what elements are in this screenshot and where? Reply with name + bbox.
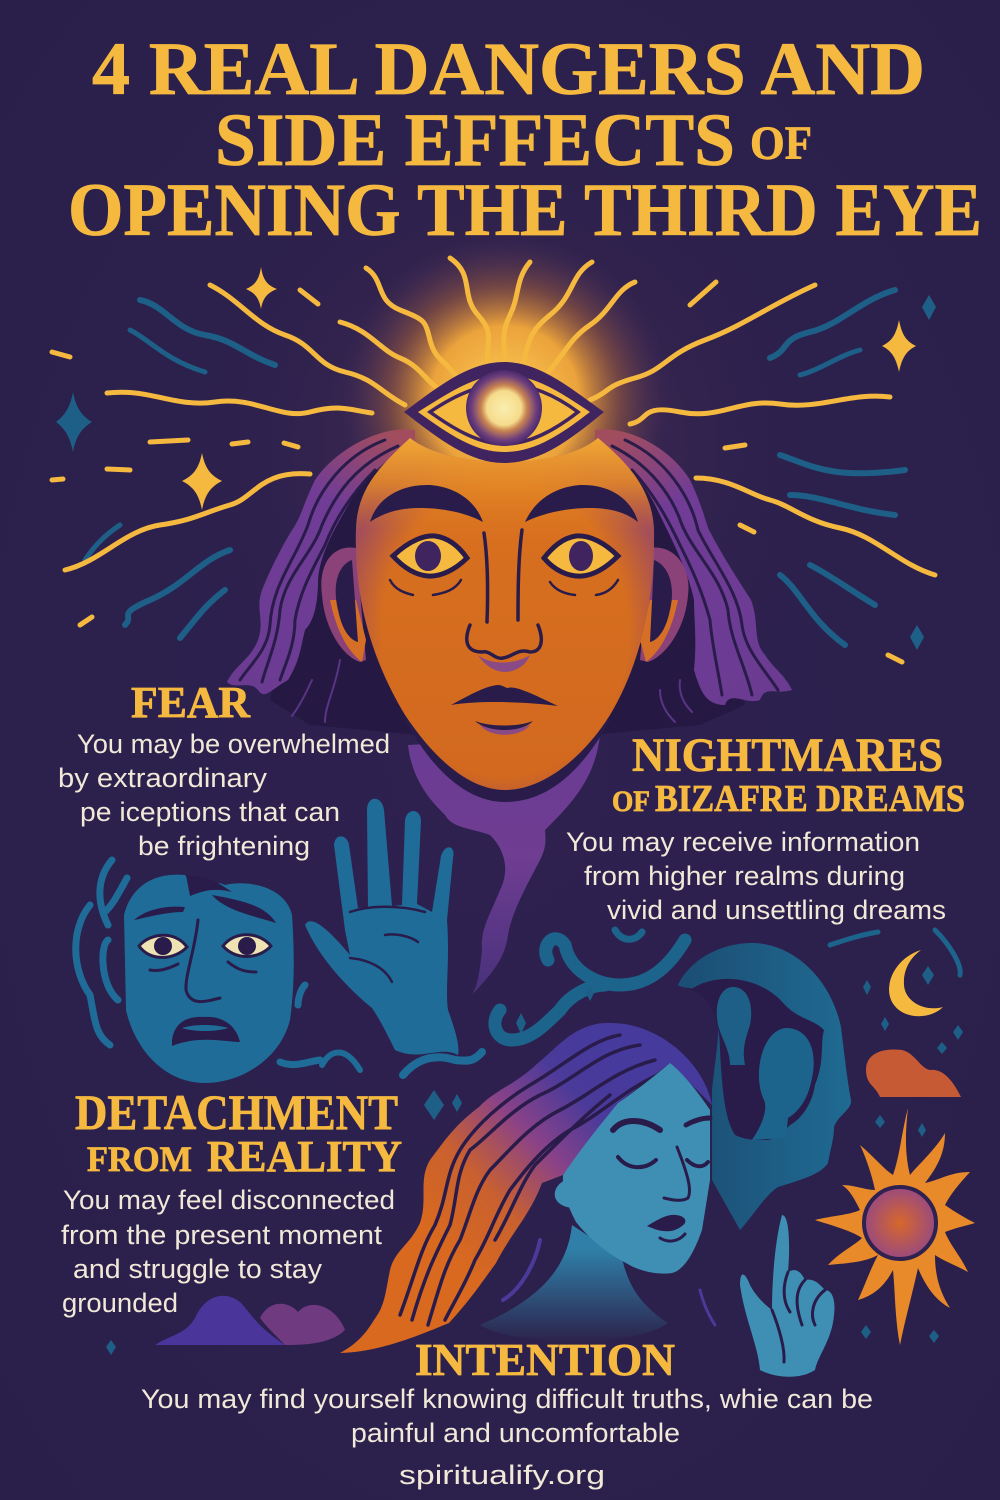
features (613, 1118, 710, 1241)
section: nightmares: OF (612, 785, 650, 818)
faint strands on dark hair (292, 660, 692, 722)
section: detachment: You may feel disconnected (63, 1185, 395, 1215)
ear (555, 1180, 572, 1208)
section: fear: pe iceptions that can (80, 797, 340, 827)
section: intention: INTENTION (415, 1334, 675, 1385)
section: nightmares (566, 729, 965, 925)
hair strands (240, 440, 778, 695)
long hair (340, 1023, 712, 1353)
third eye (404, 362, 604, 463)
sun rays (52, 258, 935, 662)
section: detachment: and struggle to stay (73, 1254, 323, 1284)
icon: crescent moon (889, 950, 943, 1016)
section: detachment: DETACHMENT (75, 1084, 398, 1140)
illustration: teal swirls (106, 930, 960, 1355)
dark under-hair (270, 470, 745, 735)
stars around moon (861, 966, 963, 1343)
section: fear: be frightening (138, 831, 310, 861)
right eye (544, 536, 618, 576)
section: intention: painful and uncomfortable (351, 1418, 680, 1448)
title: OF (750, 117, 812, 170)
section: detachment: REALITY (207, 1132, 402, 1181)
illustration: third-eye head (227, 362, 792, 995)
illustration: profile silhouette (678, 943, 851, 1230)
face (563, 1063, 710, 1274)
section: fear: You may be overwhelmed (77, 729, 390, 759)
section: fear (58, 678, 390, 861)
illustration: frightened blue face (76, 860, 320, 1083)
left eye (393, 536, 467, 576)
section: detachment: grounded (62, 1288, 178, 1318)
hair left (227, 429, 415, 694)
illustration: pointing hand (740, 1215, 835, 1377)
glow behind third eye (340, 235, 670, 565)
mouth (451, 685, 558, 706)
title: SIDE EFFECTS (215, 99, 735, 182)
section: detachment: FROM (87, 1139, 192, 1179)
icon: orange cloud (866, 1050, 961, 1097)
section: nightmares: NIGHTMARES (632, 729, 943, 782)
icon: purple cloud (155, 1296, 345, 1345)
section: intention: You may find yourself knowing difficult truths, whie can be (141, 1384, 873, 1414)
section: fear: FEAR (131, 678, 251, 727)
neck (480, 1225, 668, 1342)
illustration: raised blue hand (305, 799, 482, 1075)
illustration: woman with closed eyes (340, 1023, 715, 1353)
section: detachment (61, 1084, 402, 1318)
section: nightmares: BIZAFRE DREAMS (655, 778, 965, 820)
icon: sun (815, 1108, 975, 1345)
hair right (595, 429, 792, 705)
ears (321, 548, 366, 662)
footer url: spiritualify.org (399, 1460, 605, 1490)
background teal wisps and stars (56, 290, 936, 650)
section: intention (141, 1334, 873, 1448)
nose, eye bags (390, 530, 618, 658)
neck and smoke stream (408, 735, 600, 995)
section: fear: by extraordinary (58, 763, 268, 793)
title: 4 REAL DANGERS AND (92, 28, 925, 111)
face (405, 720, 610, 802)
brows (370, 485, 483, 522)
section: nightmares: from higher realms during (584, 861, 905, 891)
section: nightmares: vivid and unsettling dreams (607, 895, 946, 925)
section: nightmares: You may receive information (566, 827, 920, 857)
section: detachment: from the present moment (61, 1220, 383, 1250)
title (68, 28, 982, 252)
